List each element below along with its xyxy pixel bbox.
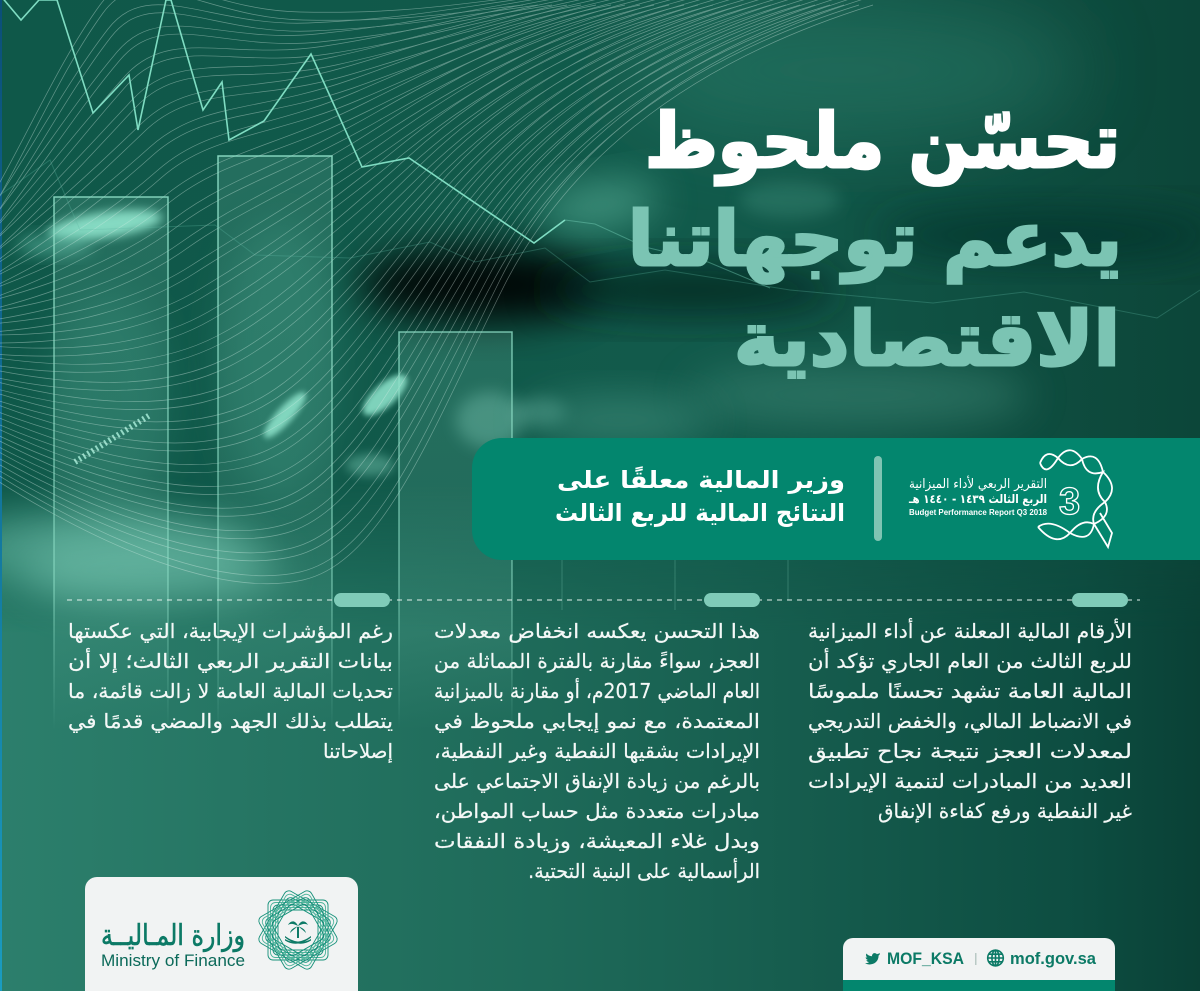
ministry name <box>101 918 245 970</box>
text block: right column: الأرقام المالية المعلنة عن أداء الميزانية <box>808 618 1132 643</box>
text block: right column: المالية العامة تشهد تحسنًا ملموسًا <box>808 679 1132 703</box>
logo card: Ministry of Finance <box>85 877 358 991</box>
text block: middle column: الإيرادات بشقيها النفطية وغير النفطية، <box>434 739 760 763</box>
text block: right column: في الانضباط المالي، والخفض التدريجي <box>808 709 1132 734</box>
ministry name: وزارة المـاليــة <box>101 918 245 952</box>
social card: twitter and website <box>843 938 1115 991</box>
title line 3: الاقتصادية <box>734 295 1120 383</box>
text block: left column <box>68 619 393 764</box>
title line 1: تحسّن ملحوظ <box>645 97 1120 186</box>
text block: middle column: بالرغم من زيادة الإنفاق الاجتماعي على <box>434 769 760 794</box>
text block: left column: يتطلب بذلك الجهد والمضي قدمًا في <box>68 709 393 734</box>
icon: ministry emblem <box>257 889 339 971</box>
ministry name: Ministry of Finance <box>101 952 245 970</box>
text block: left column: رغم المؤشرات الإيجابية، التي عكستها <box>68 619 393 644</box>
text block: middle column: هذا التحسن يعكسه انخفاض معدلات <box>434 619 760 643</box>
text block: left column: إصلاحاتنا <box>323 739 393 764</box>
banner heading: النتائج المالية للربع الثالث <box>555 499 845 527</box>
icon: Q3 ribbon ring <box>1038 450 1112 547</box>
text block: middle column: مبادرات متعددة مثل حساب المواطن، <box>434 799 760 823</box>
icon: twitter bird <box>865 953 880 964</box>
text block: right column <box>808 618 1132 823</box>
panel: minister comment banner <box>472 438 1200 560</box>
report label: Budget Performance Report Q3 2018 <box>909 508 1048 517</box>
report label <box>908 475 1048 517</box>
report label: الربع الثالث ١٤٣٩ - ١٤٤٠ هـ <box>908 492 1047 506</box>
bar chart: translucent outlined bars <box>54 156 788 730</box>
twitter handle: MOF_KSA <box>887 950 964 968</box>
text block: middle column: العام الماضي 2017م، أو مقارنة بالميزانية <box>434 678 760 704</box>
icon: Q3 ribbon ring: 3 <box>1059 481 1080 523</box>
text block: right column: لمعدلات العجز نتيجة نجاح تطبيق <box>808 739 1132 763</box>
text block: right column: غير النفطية ورفع كفاءة الإنفاق <box>878 799 1132 823</box>
text block: middle column: العجز، سواءً مقارنة بالفترة المماثلة من <box>434 649 760 673</box>
text block: left column: بيانات التقرير الربعي الثالث؛ إلا أن <box>68 648 393 674</box>
icon: globe <box>988 950 1003 966</box>
title <box>628 97 1122 383</box>
website address: mof.gov.sa <box>1010 950 1097 968</box>
text block: middle column: المعتمدة، مع نمو إيجابي ملحوظ في <box>434 709 760 734</box>
title line 2: يدعم توجهاتنا <box>628 195 1122 284</box>
report label: التقرير الربعي لأداء الميزانية <box>909 475 1047 492</box>
icon: palm and crossed swords <box>285 921 311 944</box>
line chart: zigzag trend line <box>0 0 1200 318</box>
text block: middle column: الرأسمالية على البنية التحتية. <box>528 858 760 883</box>
text block: middle column: وبدل غلاء المعيشة، وزيادة النفقات <box>434 829 760 853</box>
decorative contour lines <box>0 0 873 584</box>
text block: right column: للربع الثالث من العام الجاري تؤكد أن <box>808 648 1132 674</box>
text block: middle column <box>434 619 760 883</box>
banner divider <box>874 456 882 541</box>
text block: left column: تحديات المالية العامة لا زالت قائمة، ما <box>68 679 393 703</box>
column dividers: dashed rule with pills <box>67 593 1140 607</box>
banner heading <box>555 466 845 527</box>
separator <box>975 953 976 965</box>
banner heading: وزير المالية معلقًا على <box>557 466 845 494</box>
text block: right column: العديد من المبادرات لتنمية الإيرادات <box>808 769 1132 793</box>
